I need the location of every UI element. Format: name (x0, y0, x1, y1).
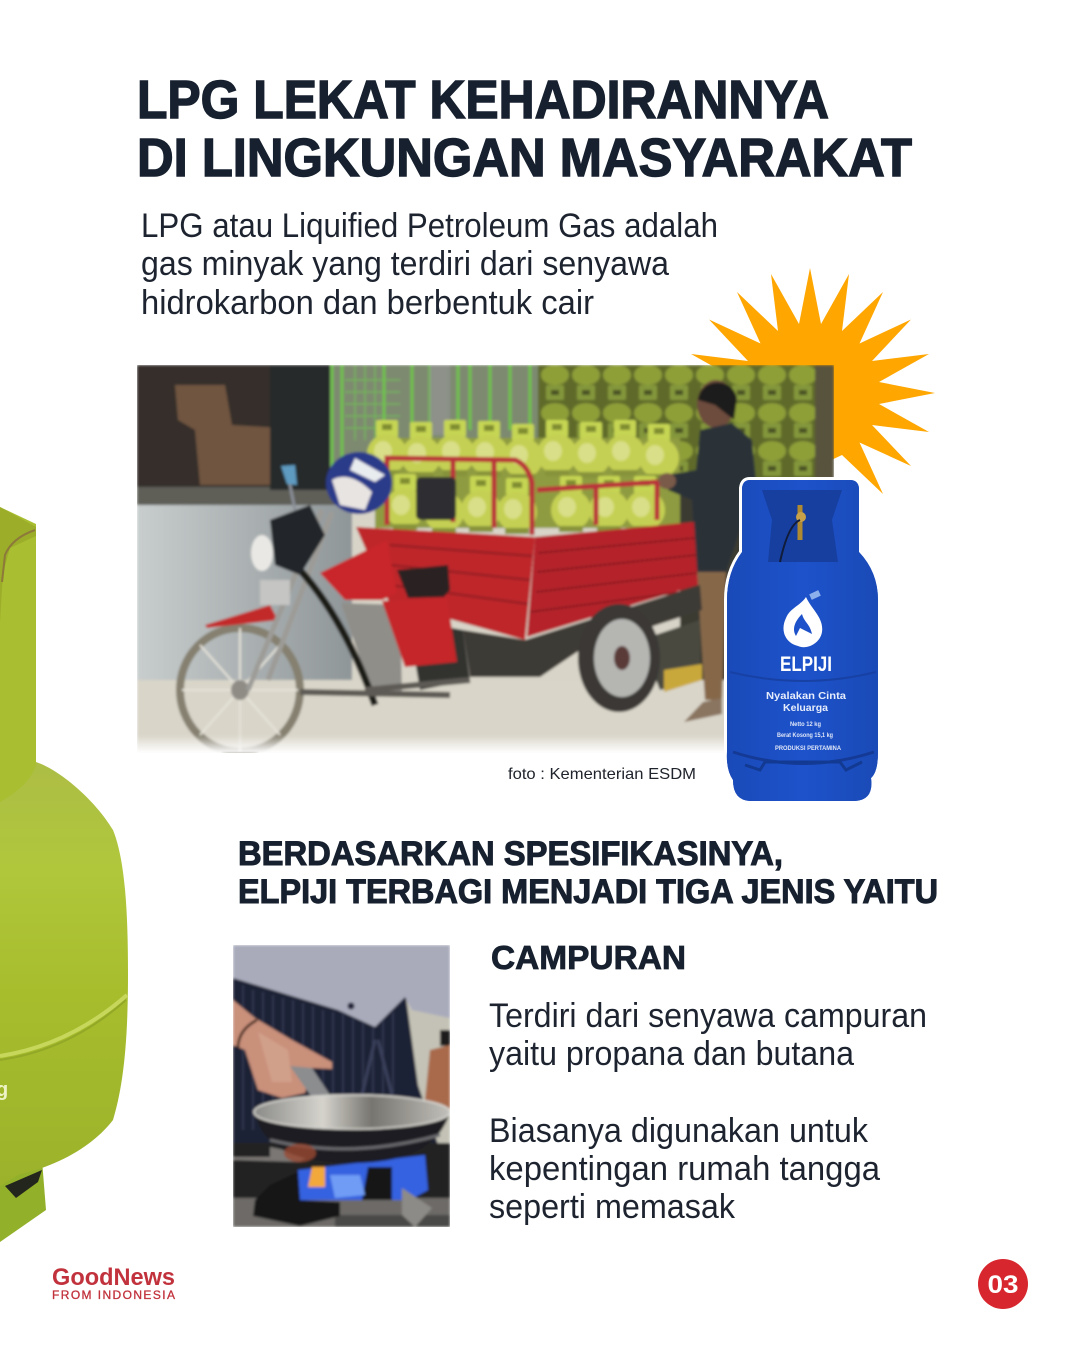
body text: Campuran description: Terdiri dari senyawa campuran (489, 997, 927, 1035)
title (137, 70, 912, 188)
page number badge (978, 1259, 1028, 1309)
intro paragraph (141, 207, 718, 322)
illustration: green 3kg LPG cylinder cropped at left (0, 507, 128, 1242)
photo credit: foto : Kementerian ESDM (508, 766, 696, 783)
subheading: ELPIJI TERBAGI MENJADI TIGA JENIS YAITU (238, 873, 938, 911)
stove (233, 1143, 450, 1227)
hand holding pan handle (233, 1000, 332, 1098)
photo: pan on a gas stove (233, 945, 450, 1227)
illustration: blue Elpiji cylinder: ELPIJI (780, 653, 832, 676)
logo: GoodNews from Indonesia: FROM INDONESIA (52, 1288, 175, 1302)
body text: Campuran description: seperti memasak (489, 1188, 736, 1226)
illustration: blue Elpiji cylinder: PRODUKSI PERTAMINA (775, 745, 841, 752)
intro paragraph: gas minyak yang terdiri dari senyawa (141, 245, 669, 283)
logo: GoodNews from Indonesia: GoodNews (52, 1264, 175, 1291)
illustration: blue Elpiji cylinder: Netto 12 kg (790, 721, 821, 728)
intro paragraph: LPG atau Liquified Petroleum Gas adalah (141, 207, 718, 245)
helmet (326, 452, 392, 514)
body text: Campuran description (489, 997, 927, 1226)
gas flame (253, 1155, 428, 1226)
title: LPG LEKAT KEHADIRANNYA (137, 70, 829, 130)
man (658, 380, 757, 722)
intro paragraph: hidrokarbon dan berbentuk cair (141, 284, 594, 322)
subheading (238, 835, 938, 911)
section heading: Campuran: CAMPURAN (491, 939, 686, 976)
rear wheel (578, 604, 660, 712)
front wheel (180, 628, 300, 752)
body text: Campuran description: yaitu propana dan butana (489, 1035, 854, 1073)
page number badge: 03 (988, 1271, 1018, 1299)
illustration: blue Elpiji cylinder: Berat Kosong 15,1 kg (777, 732, 833, 739)
body text: Campuran description: kepentingan rumah tangga (489, 1150, 880, 1188)
photo: motorcycle cart carrying LPG cylinders (137, 365, 834, 753)
cart rails (387, 458, 658, 535)
body text: Campuran description: Biasanya digunakan untuk (489, 1112, 869, 1150)
title: DI LINGKUNGAN MASYARAKAT (137, 128, 912, 188)
illustration: blue Elpiji cylinder: Nyalakan Cinta (766, 690, 846, 702)
illustration: blue Elpiji cylinder: Keluarga (783, 702, 828, 714)
icon: orange sunburst (691, 268, 935, 494)
icon: Elpiji flame logo (783, 597, 822, 647)
illustration: blue Elpiji cylinder (727, 480, 878, 801)
frying pan (254, 1095, 450, 1163)
subheading: BERDASARKAN SPESIFIKASINYA, (238, 835, 783, 873)
